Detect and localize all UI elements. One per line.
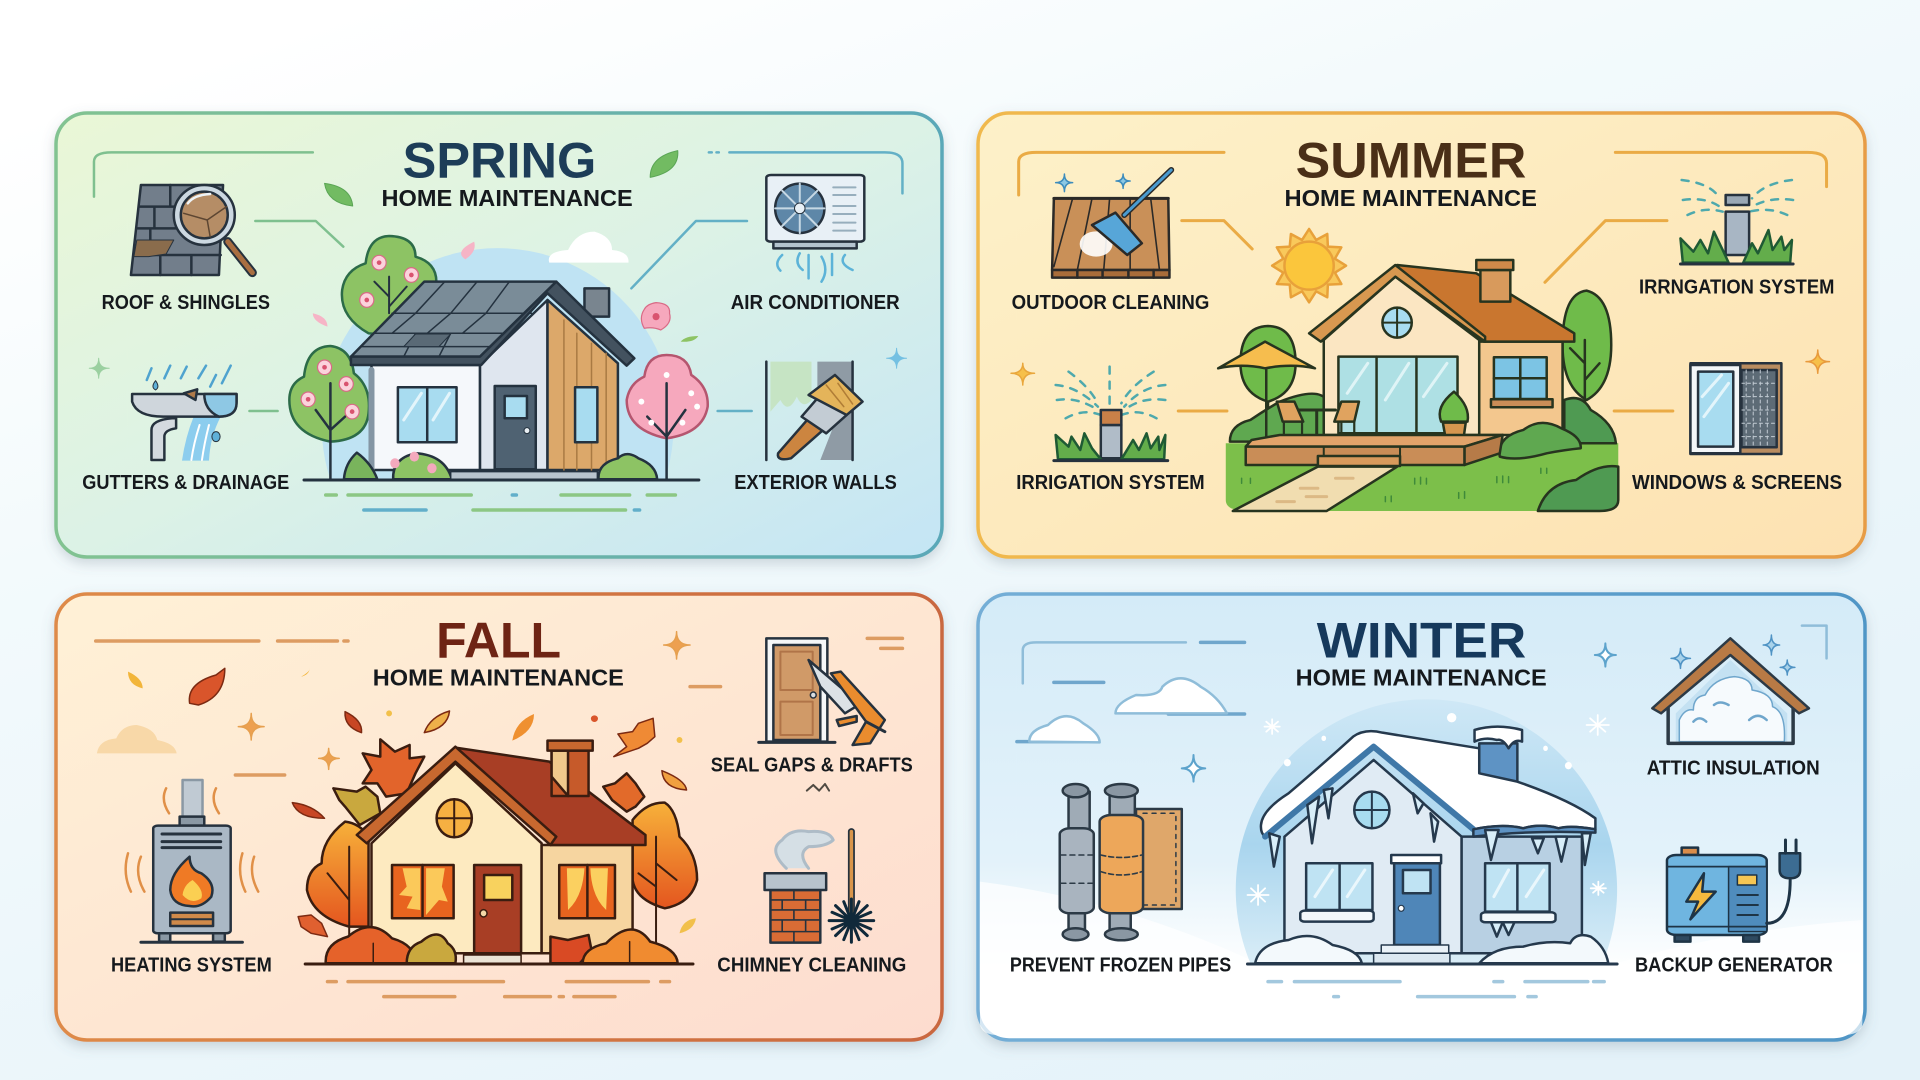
label: seal gaps and drafts: SEAL GAPS & DRAFTS — [711, 755, 913, 777]
panel: winter — [978, 594, 1865, 1040]
summer subtitle: HOME MAINTENANCE — [1284, 185, 1537, 211]
label: windows and screens: WINDOWS & SCREENS — [1632, 472, 1842, 494]
winter illustrations — [980, 626, 1862, 1035]
stray mark under seal gaps label — [807, 784, 829, 791]
label: outdoor cleaning: OUTDOOR CLEANING — [1012, 292, 1209, 314]
summer title: SUMMER — [1296, 132, 1526, 188]
panel: summer — [978, 113, 1865, 557]
icon: exterior walls brush — [766, 362, 863, 460]
house: spring — [289, 232, 708, 480]
house: summer — [1218, 260, 1618, 511]
icon: gutters and drainage — [132, 366, 237, 461]
winter title: WINTER — [1317, 612, 1526, 668]
label: roof and shingles: ROOF & SHINGLES — [102, 292, 270, 314]
winter subtitle: HOME MAINTENANCE — [1296, 664, 1547, 690]
label: air conditioner: AIR CONDITIONER — [731, 292, 900, 314]
label: irrigation system: IRRIGATION SYSTEM — [1016, 472, 1205, 494]
icon: heating system — [126, 780, 258, 942]
label: backup generator: BACKUP GENERATOR — [1635, 955, 1833, 977]
fall subtitle: HOME MAINTENANCE — [373, 664, 624, 690]
icon: irrigation system lower — [1054, 367, 1168, 461]
icon: outdoor cleaning — [1052, 170, 1171, 278]
label: irrngation system: IRRNGATION SYSTEM — [1639, 276, 1834, 298]
label: heating system: HEATING SYSTEM — [111, 955, 272, 977]
panel: fall — [56, 594, 942, 1040]
icon: irrigation system upper — [1680, 180, 1793, 264]
spring subtitle: HOME MAINTENANCE — [382, 185, 633, 211]
spring title: SPRING — [403, 132, 596, 188]
label: gutters and drainage: GUTTERS & DRAINAGE — [82, 472, 289, 494]
summer illustrations — [1011, 152, 1829, 511]
label: chimney cleaning: CHIMNEY CLEANING — [717, 955, 906, 977]
icon: seal gaps door — [759, 638, 885, 745]
label: attic insulation: ATTIC INSULATION — [1647, 757, 1820, 779]
icon: sun — [1272, 229, 1346, 302]
spring illustrations — [89, 151, 907, 510]
falling leaves — [128, 668, 696, 937]
icon: air conditioner — [766, 175, 864, 282]
icon: chimney cleaning — [765, 831, 874, 943]
label: exterior walls: EXTERIOR WALLS — [734, 472, 897, 494]
icon: prevent frozen pipes — [1060, 784, 1182, 940]
panel: spring — [56, 113, 942, 557]
fall title: FALL — [436, 612, 561, 668]
house: winter — [1236, 699, 1617, 964]
fall illustrations — [96, 632, 902, 997]
icon: windows and screens — [1690, 363, 1781, 454]
icon: attic insulation — [1652, 635, 1809, 743]
house: fall — [305, 739, 697, 964]
icon: backup generator — [1667, 840, 1800, 942]
label: prevent frozen pipes: PREVENT FROZEN PIPES — [1010, 955, 1231, 977]
icon: roof and shingles — [131, 185, 252, 275]
